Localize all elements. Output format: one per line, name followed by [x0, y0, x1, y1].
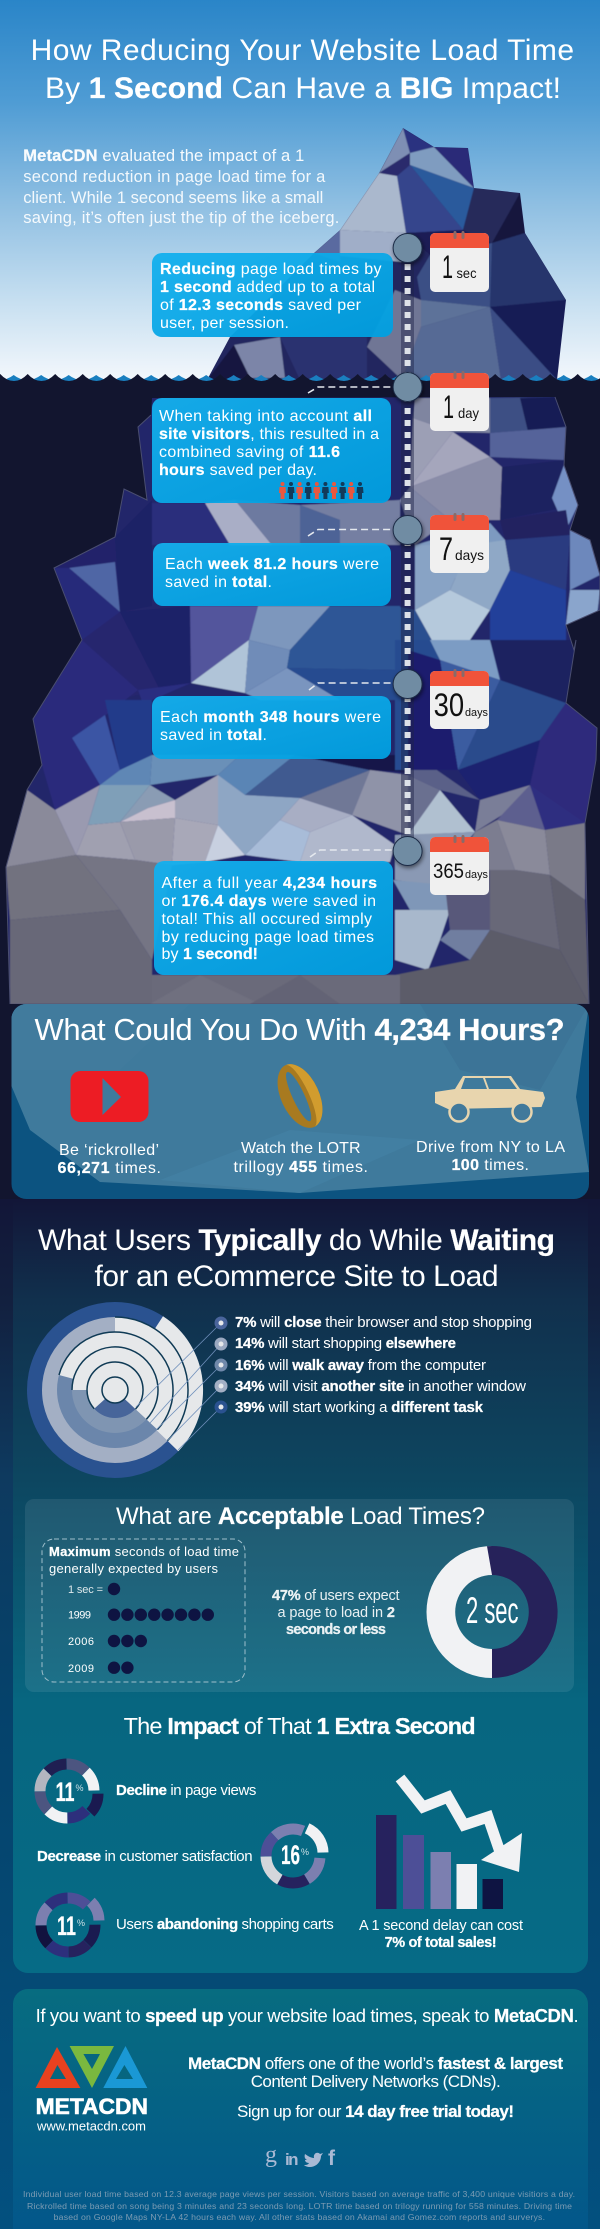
callout: 1 day: When taking into account all	[159, 408, 372, 425]
caption: sales cost: A 1 second delay can cost	[359, 1918, 523, 1934]
heading: What Could You Do With 4,234 Hours?	[34, 1012, 564, 1047]
text: 47 percent: seconds or less	[286, 1622, 386, 1638]
calendar: 1 day	[430, 371, 489, 431]
icon: people row	[279, 482, 364, 499]
social icons: in	[285, 2150, 298, 2169]
legend list: 16% will walk away from the computer	[235, 1357, 486, 1374]
footnote: Rickrolled time based on song being 3 minutes and 23 seconds long. LOTR time based on trilogy running for 558 minutes. Driving time	[27, 2201, 572, 2211]
offer text: Sign up for our 14 day free trial today!	[237, 2102, 514, 2121]
text: 47 percent	[272, 1588, 400, 1638]
timeline nodes	[393, 234, 422, 866]
footnote	[23, 2189, 575, 2222]
callout: 365 days	[154, 861, 393, 975]
stat: decrease in satisfaction	[37, 1817, 332, 1894]
legend list: 14% will start shopping elsewhere	[235, 1335, 456, 1352]
legend list: 34% will visit another site in another window	[235, 1378, 526, 1395]
heading: If you want to speed up your website load times, speak to MetaCDN.	[36, 2005, 579, 2026]
intro text: saving, it’s often just the tip of the iceberg.	[23, 209, 339, 227]
calendar: 7 days: 7	[439, 531, 453, 567]
stat: abandoning carts	[30, 1883, 334, 1963]
water surface waves	[0, 372, 600, 384]
calendar: 30 days	[430, 669, 489, 729]
panel: acceptable load times	[25, 1499, 574, 1692]
offer text: MetaCDN offers one of the world’s fastest & largest	[188, 2054, 563, 2073]
callout: 30 days: Each month 348 hours were	[160, 709, 381, 726]
sky background	[0, 0, 600, 380]
stat: decrease in satisfaction: Decrease in customer satisfaction	[37, 1848, 253, 1865]
callout: 7 days: Each week 81.2 hours were	[165, 556, 379, 573]
callout: 365 days: After a full year 4,234 hours	[162, 875, 377, 892]
stat: abandoning carts: 11	[57, 1911, 76, 1941]
heading: impact: The Impact of That 1 Extra Second	[124, 1713, 476, 1739]
page background lower	[0, 1199, 600, 2229]
callout: 365 days: total! This all occured simply	[162, 911, 372, 928]
logo: www.metacdn.com	[36, 2119, 146, 2134]
callout: 1 second: Reducing page load times by	[160, 261, 382, 278]
donut chart: 2 sec	[426, 1546, 558, 1678]
iceberg below water	[0, 390, 600, 1010]
stat: abandoning carts: %	[77, 1918, 85, 1928]
callout: 7 days	[153, 543, 391, 606]
deep water	[0, 380, 600, 1210]
dot chart box: generally expected by users	[49, 1561, 218, 1576]
logo	[36, 2046, 148, 2134]
callout: 1 day	[152, 398, 391, 503]
calendar: 365 days: 365	[433, 860, 464, 883]
connector lines	[308, 387, 394, 857]
caption: LOTR: Watch the LOTR	[241, 1140, 360, 1157]
calendar: 1 day: 1	[443, 389, 454, 425]
callout: 1 day: site visitors, this resulted in a	[159, 426, 379, 443]
caption: rickrolled: 66,271 times.	[58, 1160, 161, 1177]
callout: 30 days	[152, 696, 391, 759]
offer text: Content Delivery Networks (CDNs).	[251, 2072, 501, 2091]
dot chart box: 2009	[68, 1663, 94, 1675]
icon: gold ring	[268, 1057, 332, 1135]
intro text: second reduction in page load time for a	[23, 168, 326, 186]
dot chart box: Maximum seconds of load time	[49, 1544, 239, 1559]
caption: rickrolled: Be ‘rickrolled’	[59, 1142, 159, 1159]
intro text	[23, 147, 339, 227]
social icons: g	[265, 2142, 277, 2168]
calendar: 1 sec: 1	[442, 249, 453, 285]
iceberg above water	[208, 128, 566, 379]
caption: LOTR	[234, 1140, 368, 1176]
timeline dotted line	[401, 262, 414, 852]
callout: 1 day: combined saving of 11.6	[159, 444, 340, 461]
calendar: 7 days	[430, 513, 489, 573]
calendar: 365 days: days	[465, 869, 488, 881]
callout: 365 days: or 176.4 days were saved in	[162, 893, 376, 910]
legend list	[214, 1314, 532, 1416]
dot chart box	[42, 1539, 245, 1682]
callout: 1 second: of 12.3 seconds saved per	[160, 297, 362, 314]
callout: 1 second	[152, 253, 393, 337]
dot chart box: 1 sec =	[68, 1584, 103, 1596]
calendar: 7 days: days	[455, 547, 484, 563]
heading: what users do	[38, 1224, 555, 1293]
icon: car	[435, 1076, 545, 1122]
callout: 1 second: user, per session.	[160, 315, 289, 332]
stat: decline in page views: 11	[56, 1777, 74, 1807]
callout: 30 days: saved in total.	[160, 727, 267, 744]
caption: sales cost	[359, 1918, 523, 1951]
donut chart: 2 sec: 2 sec	[466, 1590, 518, 1631]
social icons: f	[328, 2147, 336, 2170]
legend list: 7% will close their browser and stop shopping	[235, 1314, 532, 1331]
logo: METACDN	[36, 2094, 148, 2119]
callout: 365 days: by 1 second!	[162, 946, 258, 963]
stat: decline in page views: Decline in page views	[116, 1782, 256, 1799]
callout: 1 second: 1 second added up to a total	[160, 279, 375, 296]
callout: 7 days: saved in total.	[165, 574, 272, 591]
title: How Reducing Your Website Load Time	[31, 34, 574, 67]
leader lines	[136, 1323, 221, 1450]
stat: decline in page views: %	[76, 1783, 84, 1793]
calendar: 1 sec	[430, 231, 489, 292]
intro text: client. While 1 second seems like a small	[23, 189, 323, 207]
caption: drive	[416, 1139, 565, 1174]
offer text	[188, 2054, 563, 2121]
calendar: 365 days	[430, 835, 489, 895]
stat: decrease in satisfaction: 16	[281, 1840, 300, 1870]
dot chart box: 2006	[68, 1636, 94, 1648]
stat: decrease in satisfaction: %	[301, 1847, 309, 1857]
callout: 365 days: by reducing page load times	[162, 929, 374, 946]
panel: what could you do	[11, 1004, 590, 1199]
panel: main statistics background	[13, 1200, 588, 1973]
heading: What are Acceptable Load Times?	[116, 1503, 485, 1530]
arrow	[400, 1778, 522, 1872]
footnote: Individual user load time based on 12.3 average page views per session. Visitors based on average traffic of 3,400 unique visitiors a day.	[23, 2189, 575, 2199]
calendar: 30 days: 30	[434, 687, 464, 723]
panel: footer call to action	[13, 1989, 588, 2229]
bar chart with falling arrow	[376, 1778, 522, 1909]
heading: what users do: for an eCommerce Site to Load	[94, 1260, 498, 1293]
stat: abandoning carts: Users abandoning shopping carts	[116, 1916, 334, 1933]
caption: drive: 100 times.	[452, 1157, 529, 1174]
text: 47 percent: a page to load in 2	[278, 1605, 395, 1621]
calendar: 30 days: days	[465, 707, 488, 719]
stat: decline in page views	[29, 1753, 256, 1829]
footnote: based on Google Maps NY-LA 42 hours each way. All other stats based on Akamai and Gomez.com reports and surverys.	[54, 2212, 545, 2222]
heading: what users do: What Users Typically do While Waiting	[38, 1224, 555, 1257]
caption: sales cost: 7% of total sales!	[385, 1935, 497, 1951]
calendar: 1 sec: sec	[456, 265, 476, 281]
caption: rickrolled	[58, 1142, 161, 1177]
callout: 1 day: hours saved per day.	[159, 462, 317, 479]
legend list: 39% will start working a different task	[235, 1399, 484, 1416]
calendar: 1 day: day	[458, 405, 479, 421]
radial chart	[27, 1302, 203, 1478]
intro text: MetaCDN evaluated the impact of a 1	[23, 147, 304, 165]
icon: video play button	[70, 1071, 148, 1122]
title: By 1 Second Can Have a BIG Impact!	[45, 72, 561, 105]
caption: LOTR: trillogy 455 times.	[234, 1159, 368, 1176]
dot chart box: 1999	[68, 1610, 91, 1622]
social icons	[265, 2142, 336, 2170]
text: 47 percent: 47% of users expect	[272, 1588, 400, 1604]
title	[31, 34, 574, 105]
caption: drive: Drive from NY to LA	[416, 1139, 565, 1156]
